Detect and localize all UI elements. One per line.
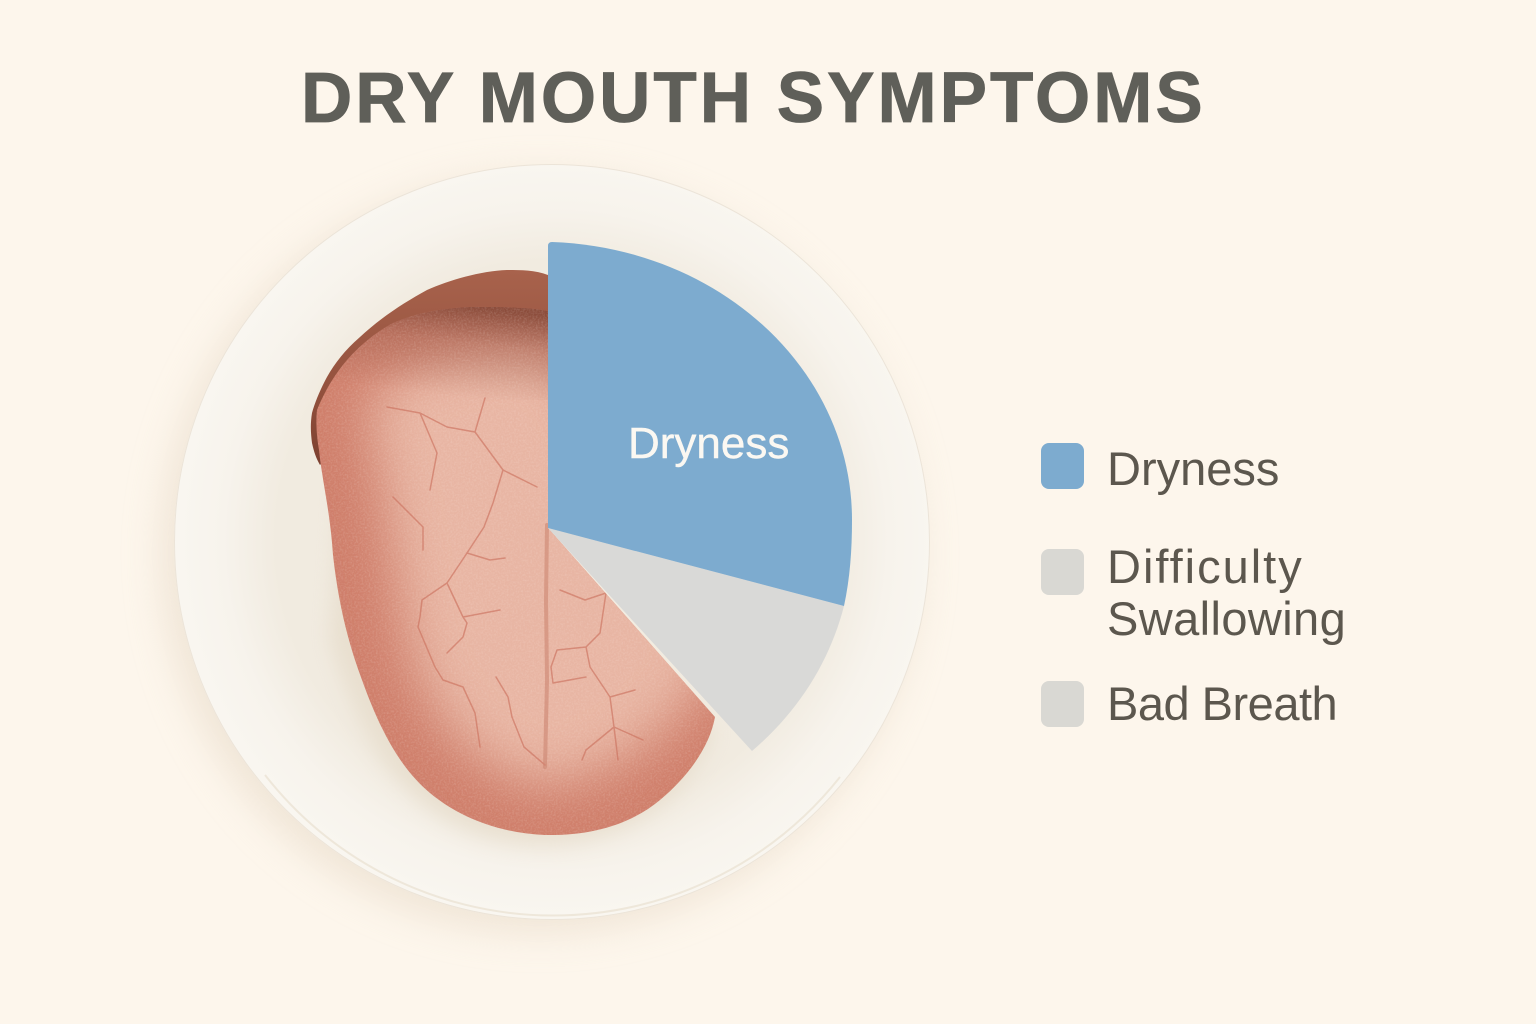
legend item: difficulty swallowing: Swallowing [1107, 592, 1346, 645]
pie label: Dryness [628, 419, 789, 468]
title: DRY MOUTH SYMPTOMS [301, 59, 1206, 138]
pie slice: difficulty swallowing and bad breath [548, 528, 844, 751]
tongue [300, 270, 730, 845]
legend item: dryness: Dryness [1107, 442, 1279, 495]
pie slice: dryness [548, 242, 852, 606]
plate chart illustration [156, 164, 930, 938]
plate [160, 164, 930, 934]
legend item: difficulty swallowing: Difficulty [1107, 540, 1304, 593]
legend [1041, 442, 1346, 730]
legend item: difficulty swallowing [1041, 540, 1346, 645]
tongue cracks [387, 398, 643, 767]
legend item: bad breath: Bad Breath [1107, 677, 1337, 730]
